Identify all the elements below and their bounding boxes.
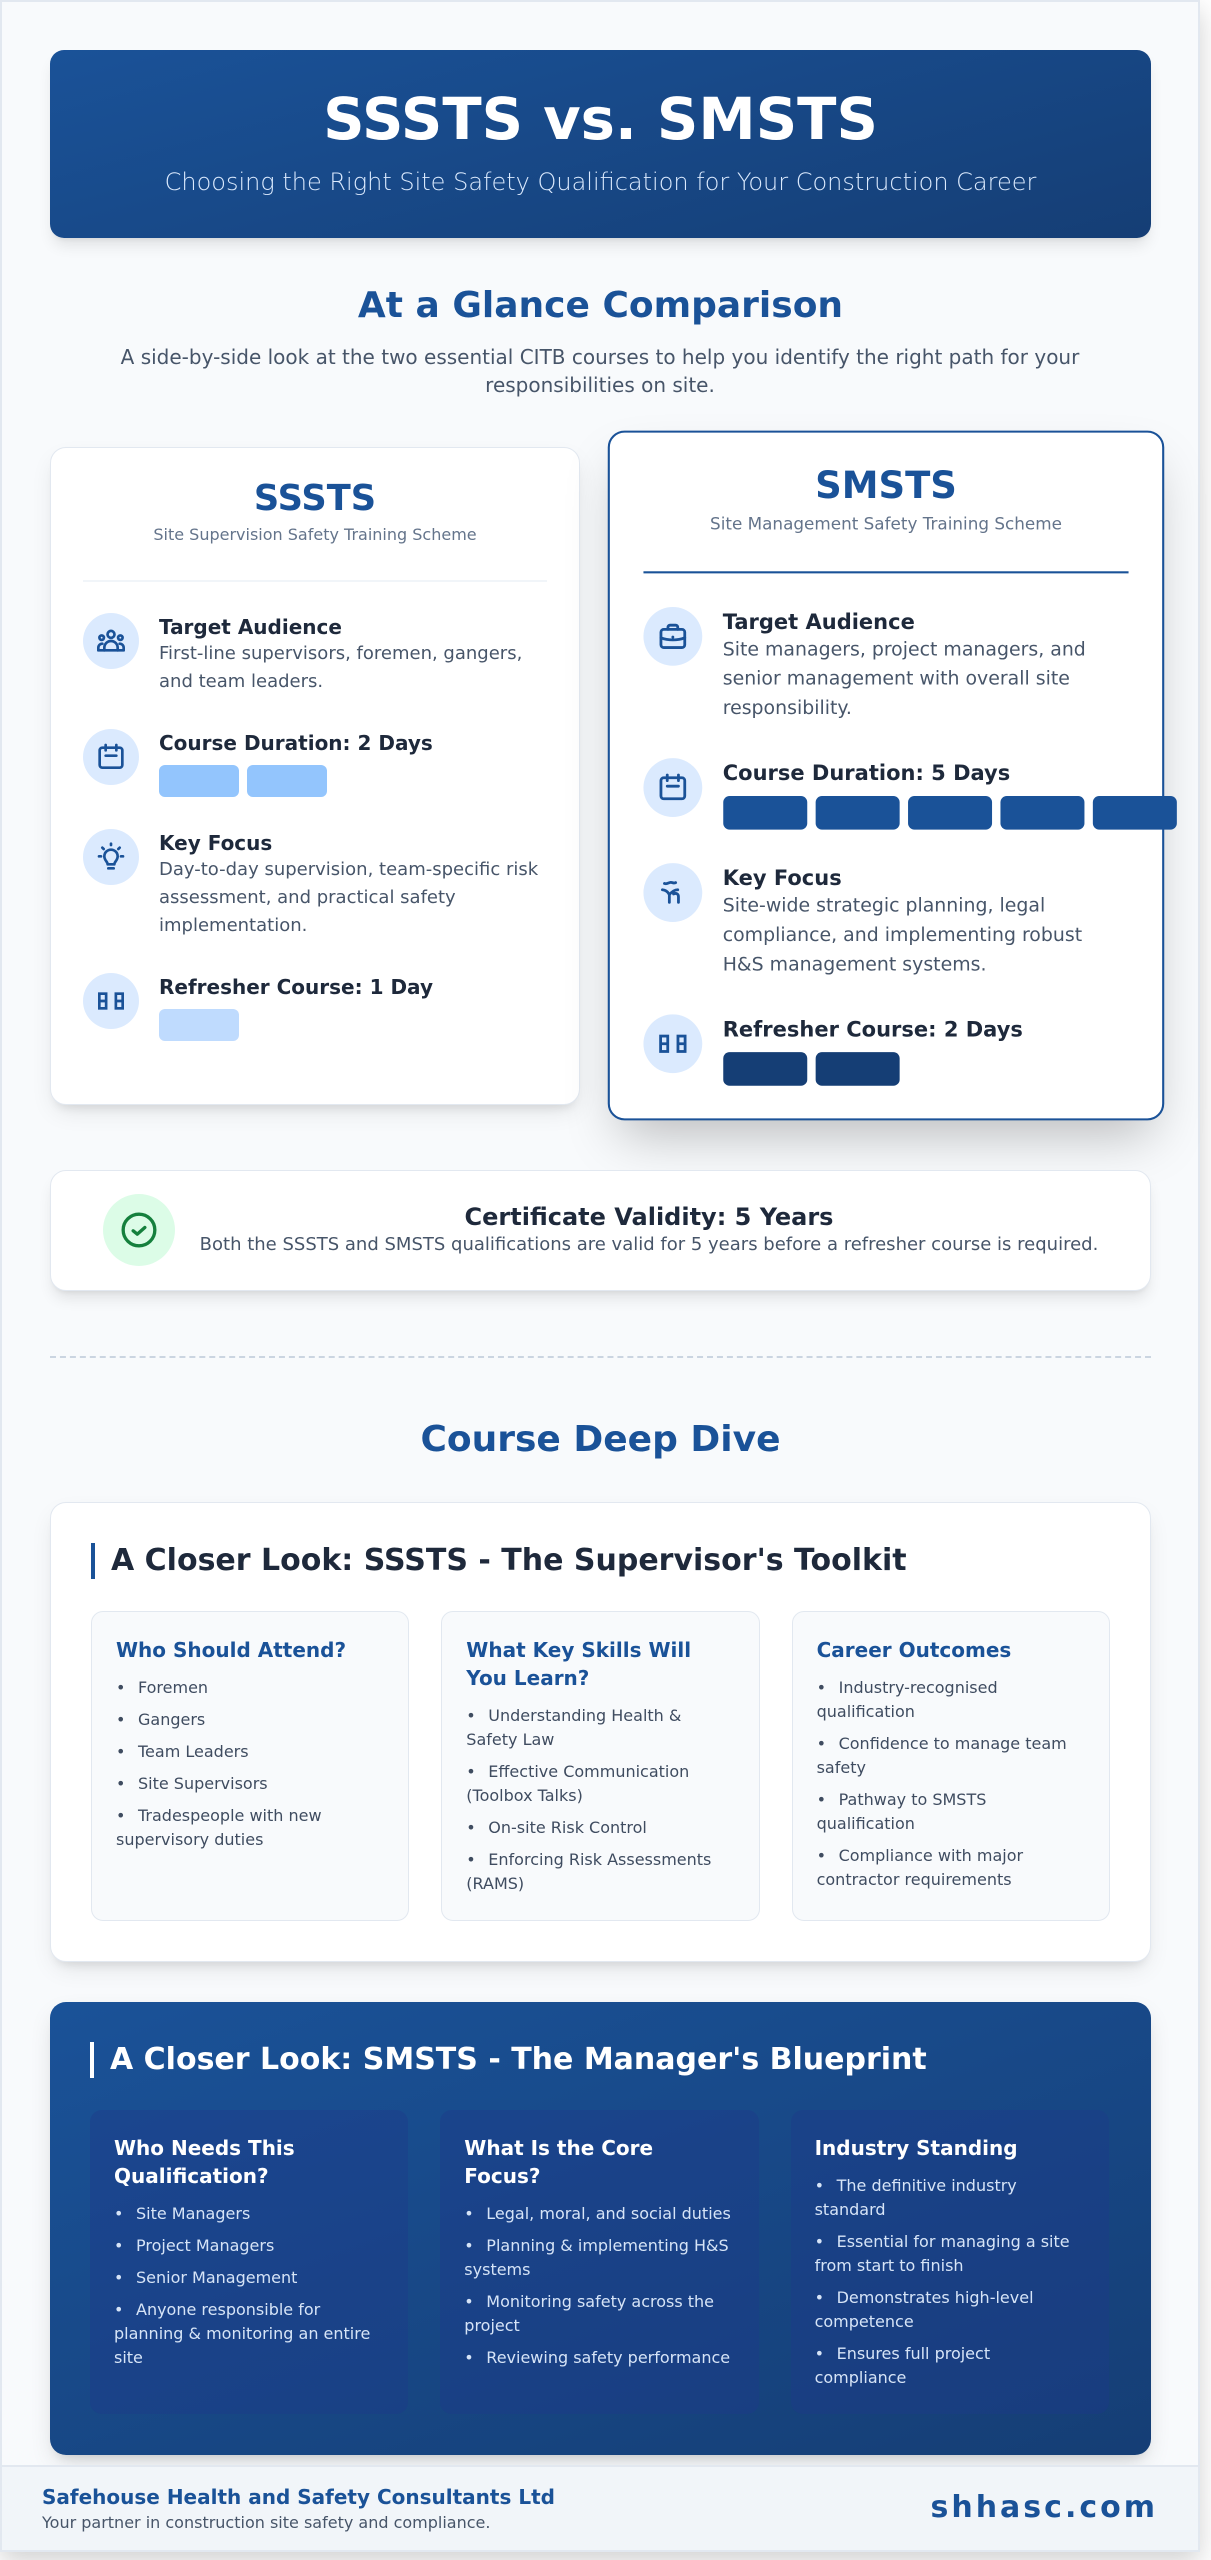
column: career outcomes: • <box>817 1790 826 1809</box>
column: industry standing: Ensures full project compliance <box>815 2344 990 2387</box>
column: industry standing <box>791 2110 1109 2414</box>
column: core focus: Planning & implementing H&S systems <box>464 2236 729 2279</box>
card subtitle: Site Supervision Safety Training Scheme <box>153 525 477 544</box>
column: who should attend: • <box>116 1710 125 1729</box>
column: core focus: • <box>464 2292 474 2311</box>
text and day bars <box>723 1016 1023 1086</box>
column: who needs this: Anyone responsible for planning & monitoring an entire site <box>114 2300 370 2367</box>
column: industry standing: • <box>815 2288 824 2307</box>
item: target audience <box>644 607 1086 720</box>
column: who needs this: • <box>114 2236 123 2255</box>
website: shhasc.com <box>930 2490 1158 2525</box>
column: core focus: • <box>464 2236 474 2255</box>
intro text: A side-by-side look at the two essential CITB courses to help you identify the right path for your responsibilities on site. <box>121 344 1079 397</box>
icon: briefcase <box>643 607 702 666</box>
icon: lightbulb <box>83 829 139 885</box>
footer <box>0 2465 1200 2552</box>
icon: check circle <box>103 1194 175 1266</box>
column: who should attend: Site Supervisors <box>138 1774 268 1793</box>
icon: strategy glyph <box>643 863 702 922</box>
column: key skills <box>441 1611 760 1921</box>
icon: refresher blocks <box>83 973 139 1029</box>
text and day bar <box>159 975 433 1041</box>
card subtitle: Site Management Safety Training Scheme <box>710 514 1062 533</box>
column: career outcomes: Industry-recognised qualification <box>817 1678 998 1721</box>
text and day bars: Refresher Course: 2 Days <box>723 1016 1023 1042</box>
section title: A Closer Look: SMSTS - The Manager's Blueprint <box>110 2042 927 2077</box>
column: who should attend: Foremen <box>138 1678 208 1697</box>
text: Target Audience <box>159 615 342 639</box>
text and day bars <box>723 760 1177 830</box>
text: First-line supervisors, foremen, gangers, and team leaders. <box>159 643 522 692</box>
column: career outcomes: Compliance with major contractor requirements <box>817 1846 1023 1889</box>
column: who needs this: • <box>114 2300 123 2319</box>
heading: at a glance: At a Glance Comparison <box>358 285 843 326</box>
column: who should attend: • <box>116 1774 125 1793</box>
column: industry standing: • <box>815 2344 824 2363</box>
subtitle: Choosing the Right Site Safety Qualification for Your Construction Career <box>165 168 1036 196</box>
text: Key Focus <box>159 831 272 855</box>
panel: SMSTS closer look <box>50 2002 1151 2455</box>
icon: calendar <box>643 758 702 817</box>
header banner <box>50 50 1151 238</box>
panel: certificate validity <box>50 1170 1151 1291</box>
column: industry standing: Essential for managing a site from start to finish <box>815 2232 1070 2275</box>
column: key skills: Effective Communication (Toolbox Talks) <box>466 1762 689 1805</box>
certificate text: Both the SSSTS and SMSTS qualifications are valid for 5 years before a refresher course is required. <box>200 1234 1098 1255</box>
column: core focus: • <box>464 2204 474 2223</box>
item: course duration <box>644 758 1177 830</box>
text and day bars <box>159 731 433 797</box>
column: key skills: Enforcing Risk Assessments (RAMS) <box>466 1850 711 1893</box>
column: key skills: • <box>466 1850 476 1869</box>
tagline: Your partner in construction site safety and compliance. <box>42 2513 490 2532</box>
heading: course deep dive: Course Deep Dive <box>420 1419 781 1460</box>
column: core focus: Monitoring safety across the project <box>464 2292 714 2335</box>
column: career outcomes: Career Outcomes <box>817 1638 1011 1662</box>
column: industry standing: Industry Standing <box>815 2136 1018 2160</box>
panel: SSSTS card <box>50 447 580 1105</box>
column: who should attend: Tradespeople with new supervisory duties <box>116 1806 322 1849</box>
item: target audience <box>83 613 522 692</box>
text and day bars: Course Duration: 5 Days <box>723 760 1010 785</box>
item: course duration <box>83 729 433 797</box>
panel: SSSTS closer look <box>50 1502 1151 1962</box>
column: career outcomes <box>792 1611 1110 1921</box>
column: who should attend: Gangers <box>138 1710 205 1729</box>
column: key skills: On-site Risk Control <box>488 1818 647 1837</box>
column: career outcomes: • <box>817 1734 826 1753</box>
column: who should attend: • <box>116 1742 125 1761</box>
column: who needs this: • <box>114 2204 123 2223</box>
text: Site managers, project managers, and senior management with overall site responsibility. <box>723 638 1086 720</box>
column: who needs this: Site Managers <box>136 2204 250 2223</box>
certificate title: Certificate Validity: 5 Years <box>465 1203 833 1231</box>
columns <box>90 2110 1070 2387</box>
column: who needs this <box>90 2110 408 2414</box>
column: career outcomes: Pathway to SMSTS qualification <box>817 1790 986 1833</box>
column: core focus: Legal, moral, and social duties <box>486 2204 731 2223</box>
column: key skills: • <box>466 1706 476 1725</box>
item: key focus <box>644 863 1082 976</box>
column: core focus <box>440 2110 759 2414</box>
column: who needs this: • <box>114 2268 123 2287</box>
column: who needs this: Who Needs This Qualification? <box>114 2136 295 2188</box>
column: industry standing: • <box>815 2176 824 2195</box>
column: career outcomes: Confidence to manage team safety <box>817 1734 1067 1777</box>
text <box>159 615 522 692</box>
card title: SMSTS <box>815 464 957 507</box>
icon: team <box>83 613 139 669</box>
text and day bar: Refresher Course: 1 Day <box>159 975 433 999</box>
item: refresher <box>83 973 433 1041</box>
column: key skills: What Key Skills Will You Learn? <box>466 1638 691 1690</box>
section title: A Closer Look: SSSTS - The Supervisor's Toolkit <box>111 1543 907 1578</box>
column: who should attend: Who Should Attend? <box>116 1638 346 1662</box>
icon: calendar <box>83 729 139 785</box>
column: industry standing: Demonstrates high-level competence <box>815 2288 1034 2331</box>
column: key skills: Understanding Health & Safety Law <box>466 1706 681 1749</box>
text: Key Focus <box>723 865 842 890</box>
title: SSSTS vs. SMSTS <box>323 86 878 153</box>
column: industry standing: The definitive industry standard <box>815 2176 1017 2219</box>
text: Site-wide strategic planning, legal compliance, and implementing robust H&S management systems. <box>723 895 1082 976</box>
column: career outcomes: • <box>817 1846 826 1865</box>
column: key skills: • <box>466 1818 476 1837</box>
column: who needs this: Project Managers <box>136 2236 274 2255</box>
text and day bars: Course Duration: 2 Days <box>159 731 433 755</box>
column: core focus: Reviewing safety performance <box>486 2348 730 2367</box>
column: who should attend: • <box>116 1678 125 1697</box>
text: Day-to-day supervision, team-specific risk assessment, and practical safety implementation. <box>159 859 538 936</box>
company name: Safehouse Health and Safety Consultants Ltd <box>42 2485 555 2509</box>
column: who should attend: Team Leaders <box>138 1742 249 1761</box>
panel: SMSTS card <box>608 431 1164 1120</box>
text: Target Audience <box>723 609 915 634</box>
item: refresher <box>644 1014 1023 1086</box>
column: who needs this: Senior Management <box>136 2268 297 2287</box>
column: core focus: What Is the Core Focus? <box>464 2136 653 2188</box>
item: key focus <box>83 829 538 936</box>
column: who should attend <box>91 1611 409 1921</box>
card title: SSSTS <box>254 478 376 519</box>
column: who should attend: • <box>116 1806 125 1825</box>
column: career outcomes: • <box>817 1678 826 1697</box>
columns <box>91 1611 1110 1921</box>
column: key skills: • <box>466 1762 476 1781</box>
icon: refresher blocks <box>643 1014 702 1073</box>
column: industry standing: • <box>815 2232 824 2251</box>
column: core focus: • <box>464 2348 474 2367</box>
